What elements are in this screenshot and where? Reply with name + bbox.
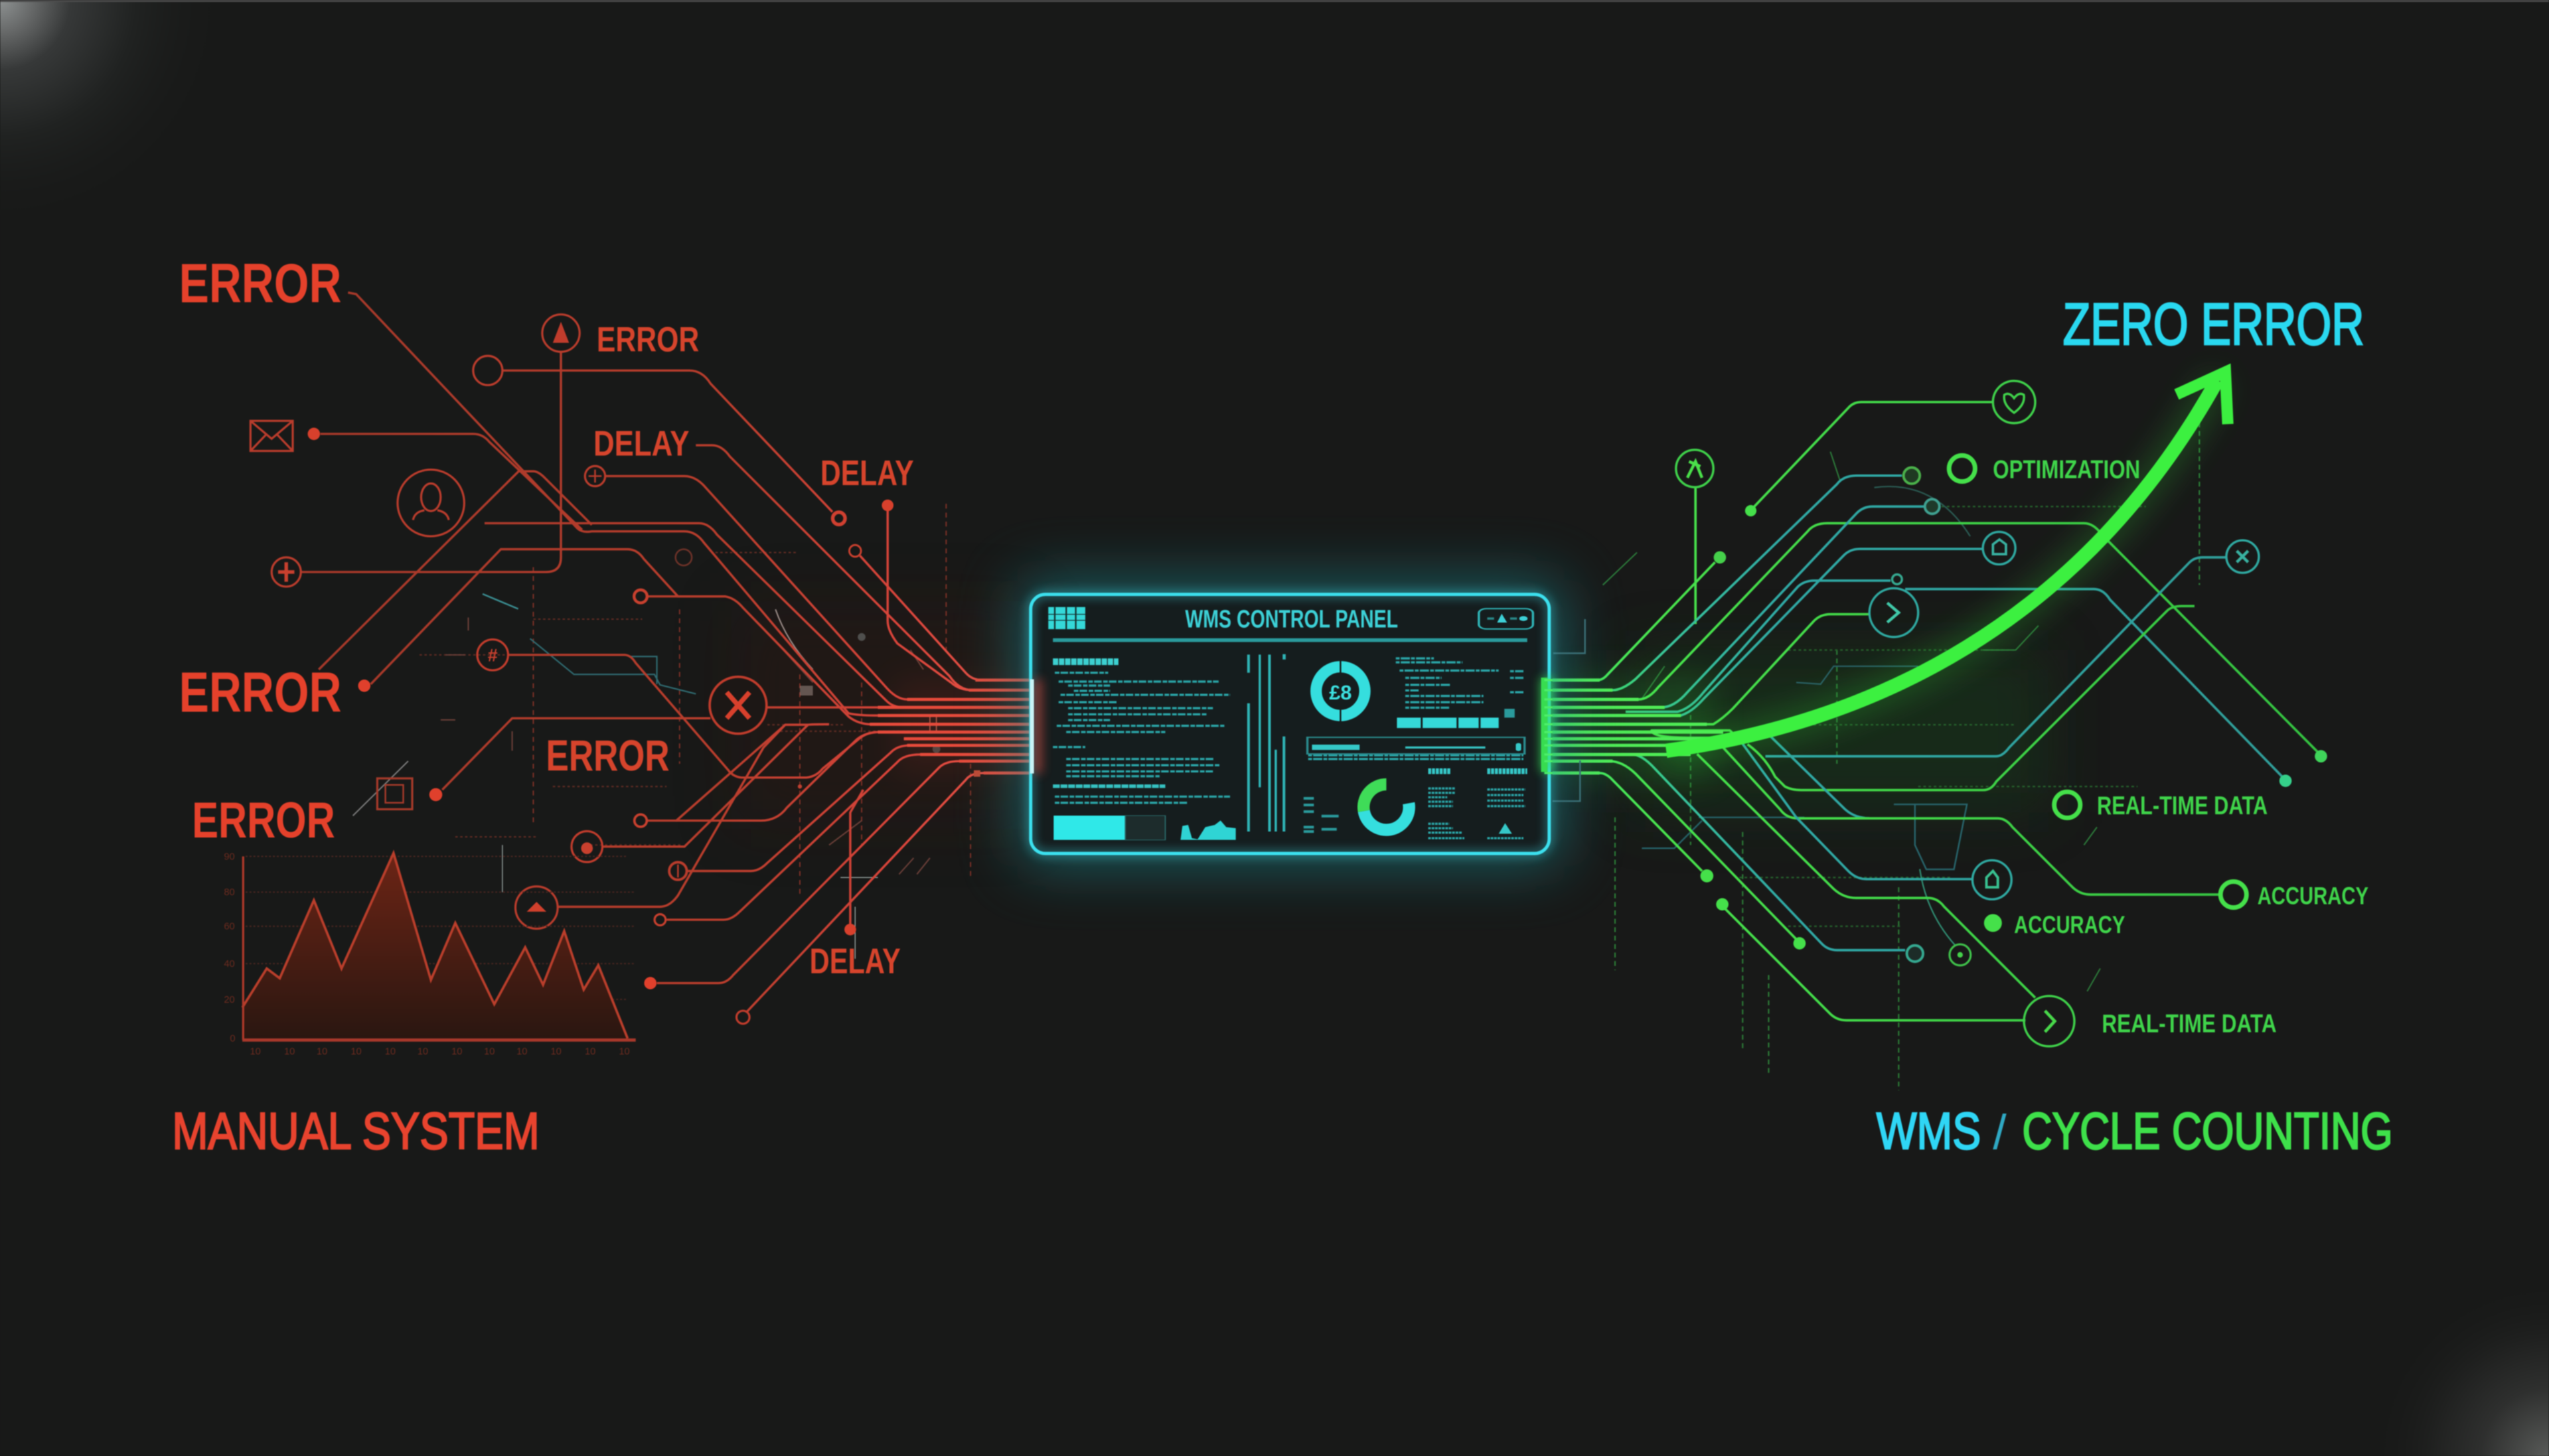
chart y axis labels: 80 bbox=[224, 887, 235, 898]
chart y axis labels: 90 bbox=[224, 851, 235, 862]
progress block bbox=[1053, 816, 1165, 840]
bundle end: left red glow bbox=[1030, 680, 1042, 774]
chart x axis labels: 10 bbox=[350, 1047, 362, 1057]
label: real-time data with ring: REAL-TIME DATA bbox=[2097, 792, 2268, 820]
icon: dot lower 3 bbox=[1794, 937, 1806, 950]
right text rows bbox=[1308, 658, 1523, 759]
heading: manual system: MANUAL SYSTEM bbox=[172, 1102, 540, 1160]
heading: wms cycle counting bbox=[1877, 1102, 2393, 1160]
chart x axis labels: 10 bbox=[551, 1047, 562, 1057]
icon: end dot teal bbox=[2279, 774, 2291, 787]
panel: WMS control panel bbox=[1031, 595, 1549, 853]
chart x axis labels: 10 bbox=[451, 1047, 462, 1057]
icon: hub lower bbox=[669, 862, 687, 880]
label: optimization with ring: OPTIMIZATION bbox=[1993, 456, 2140, 484]
chart axes bbox=[242, 856, 244, 1040]
icon: gear circle: # bbox=[488, 646, 498, 666]
bright bundle right bbox=[1553, 680, 1723, 773]
icon: teal share circle bbox=[2226, 540, 2259, 573]
icon: chevron circle bbox=[1869, 588, 1918, 637]
chart grid bbox=[246, 856, 634, 999]
bundle end: right green bar bbox=[1540, 678, 1553, 773]
icon: dot lower 1 bbox=[1701, 869, 1713, 883]
icon: small teal node bbox=[1892, 575, 1902, 584]
faint background circuitry right bbox=[1603, 423, 2199, 1090]
green and teal circuit lines bbox=[1553, 402, 2318, 1021]
label: accuracy with ring: ACCURACY bbox=[2258, 882, 2368, 910]
icon: ring bottom bbox=[736, 1011, 749, 1024]
icon: faint ring bbox=[676, 549, 692, 565]
icon: alert circle bbox=[542, 315, 579, 352]
faint background circuitry left bbox=[353, 504, 1032, 959]
icon: dot envelope bbox=[308, 427, 320, 440]
label: error small top: ERROR bbox=[597, 321, 699, 360]
icon: end ring bbox=[849, 545, 861, 557]
chart x axis labels: 10 bbox=[317, 1047, 327, 1057]
chart: top donut bbox=[1316, 660, 1365, 721]
chart x axis labels: 10 bbox=[385, 1047, 396, 1057]
panel: wms side bbox=[1553, 291, 2393, 1160]
icon: pin dot bottom bbox=[844, 924, 856, 935]
arrow glow bbox=[1666, 380, 2217, 751]
icon: dot green left bbox=[1745, 505, 1756, 516]
label: delay bottom: DELAY bbox=[810, 942, 901, 982]
icon: small green node lower bbox=[1950, 944, 1971, 966]
icon: dot mid bbox=[358, 680, 370, 692]
icon: person bbox=[398, 470, 464, 536]
chart x axis labels bbox=[250, 1047, 630, 1057]
chart x axis labels: 10 bbox=[585, 1047, 595, 1057]
icon: dot doc bbox=[429, 788, 442, 801]
status pill bbox=[1479, 609, 1533, 629]
icon: chart circle bbox=[515, 887, 558, 928]
icon: dot lower bbox=[644, 977, 657, 989]
icon: tool circle bbox=[1676, 450, 1713, 487]
label: real-time data with ring bbox=[2054, 792, 2268, 820]
icon: X circle bbox=[710, 677, 767, 734]
icon: dot green second bbox=[1714, 551, 1726, 563]
red circuit lines bbox=[301, 293, 1032, 1013]
chart y axis labels bbox=[224, 851, 235, 1045]
chart y axis labels: 0 bbox=[230, 1034, 235, 1045]
icon: plus circle bbox=[271, 557, 301, 587]
label: delay two: DELAY bbox=[820, 453, 914, 493]
chart: error area chart bbox=[224, 851, 636, 1057]
label: delay one: DELAY bbox=[593, 424, 690, 464]
icon: flame circle bbox=[572, 831, 602, 862]
header divider bbox=[1053, 638, 1527, 642]
chart y axis labels: 20 bbox=[224, 995, 235, 1005]
heading: wms cycle counting: WMS bbox=[1877, 1102, 1981, 1160]
chart line bbox=[242, 853, 627, 1039]
chart area bbox=[242, 853, 627, 1039]
heading: zero error: ZERO ERROR bbox=[2063, 291, 2364, 357]
heading: wms cycle counting: / bbox=[1993, 1105, 2007, 1159]
icon: heart circle bbox=[1993, 381, 2035, 423]
label: error center: ERROR bbox=[546, 731, 670, 780]
icon: teal home circle bbox=[1983, 532, 2015, 564]
panel: manual system side bbox=[172, 252, 1034, 1160]
chart x axis labels: 10 bbox=[619, 1047, 630, 1057]
chart x axis labels: 10 bbox=[516, 1047, 527, 1057]
bundle glow right bbox=[1553, 674, 1715, 780]
icon: ring top bbox=[473, 356, 502, 385]
arrow: rising green bbox=[1666, 372, 2228, 751]
left text rows bbox=[1053, 662, 1230, 803]
panel details bbox=[1048, 607, 1533, 840]
chart x axis labels: 10 bbox=[284, 1047, 295, 1057]
chart x axis labels: 10 bbox=[250, 1047, 261, 1057]
icon: end dot right bbox=[2315, 750, 2327, 763]
icon: small ring lower bbox=[635, 814, 647, 827]
icon: dot lower 2 bbox=[1716, 898, 1729, 910]
icon: small teal node lower bbox=[1907, 946, 1923, 962]
icon: pin dot bbox=[882, 500, 893, 511]
label: real-time data lower: REAL-TIME DATA bbox=[2102, 1009, 2277, 1038]
label: accuracy with dot: ACCURACY bbox=[2014, 910, 2125, 938]
bundle glow left bbox=[894, 680, 1034, 774]
panel frame bbox=[1031, 595, 1549, 853]
mini chart bbox=[1180, 820, 1236, 840]
panel glow bbox=[1018, 580, 1564, 866]
icon: envelope bbox=[250, 421, 293, 451]
chart x axis labels: 10 bbox=[418, 1047, 428, 1057]
label: accuracy with ring bbox=[2220, 881, 2368, 910]
icon: small ring bbox=[634, 590, 647, 603]
bright bundle left bbox=[870, 680, 1032, 773]
icon: small teal hub bbox=[1925, 499, 1940, 514]
chart: top donut: £8 bbox=[1329, 682, 1352, 704]
icon: end dot upper bbox=[832, 512, 845, 524]
chart y axis labels: 60 bbox=[224, 922, 235, 932]
label: error lower: ERROR bbox=[192, 792, 335, 849]
icon: ring lower bbox=[655, 914, 666, 925]
chart: lower donut bbox=[1363, 784, 1409, 830]
icon: hub top bbox=[585, 466, 605, 486]
icon: small green hub bbox=[1904, 467, 1920, 484]
label: error middle: ERROR bbox=[179, 661, 341, 725]
icon: gear circle bbox=[477, 640, 508, 670]
lower stats bbox=[1304, 771, 1527, 838]
icon: teal hand circle bbox=[1972, 860, 2011, 899]
label: error top: ERROR bbox=[179, 252, 341, 314]
icon: chevron circle lower bbox=[2024, 996, 2074, 1047]
heading: WMS control panel: WMS CONTROL PANEL bbox=[1185, 605, 1398, 633]
label: accuracy with dot bbox=[1984, 910, 2125, 938]
heading: wms cycle counting: CYCLE COUNTING bbox=[2022, 1102, 2393, 1160]
icon: document bbox=[377, 778, 412, 809]
labels left bbox=[179, 252, 914, 982]
divider ticks bbox=[1247, 654, 1286, 832]
connector stubs bbox=[1553, 619, 1585, 801]
chart y axis labels: 40 bbox=[224, 959, 235, 970]
header logo block bbox=[1048, 607, 1085, 629]
status bar bbox=[1308, 737, 1525, 754]
chart x axis labels: 10 bbox=[484, 1047, 495, 1057]
label: optimization with ring bbox=[1949, 455, 2140, 484]
